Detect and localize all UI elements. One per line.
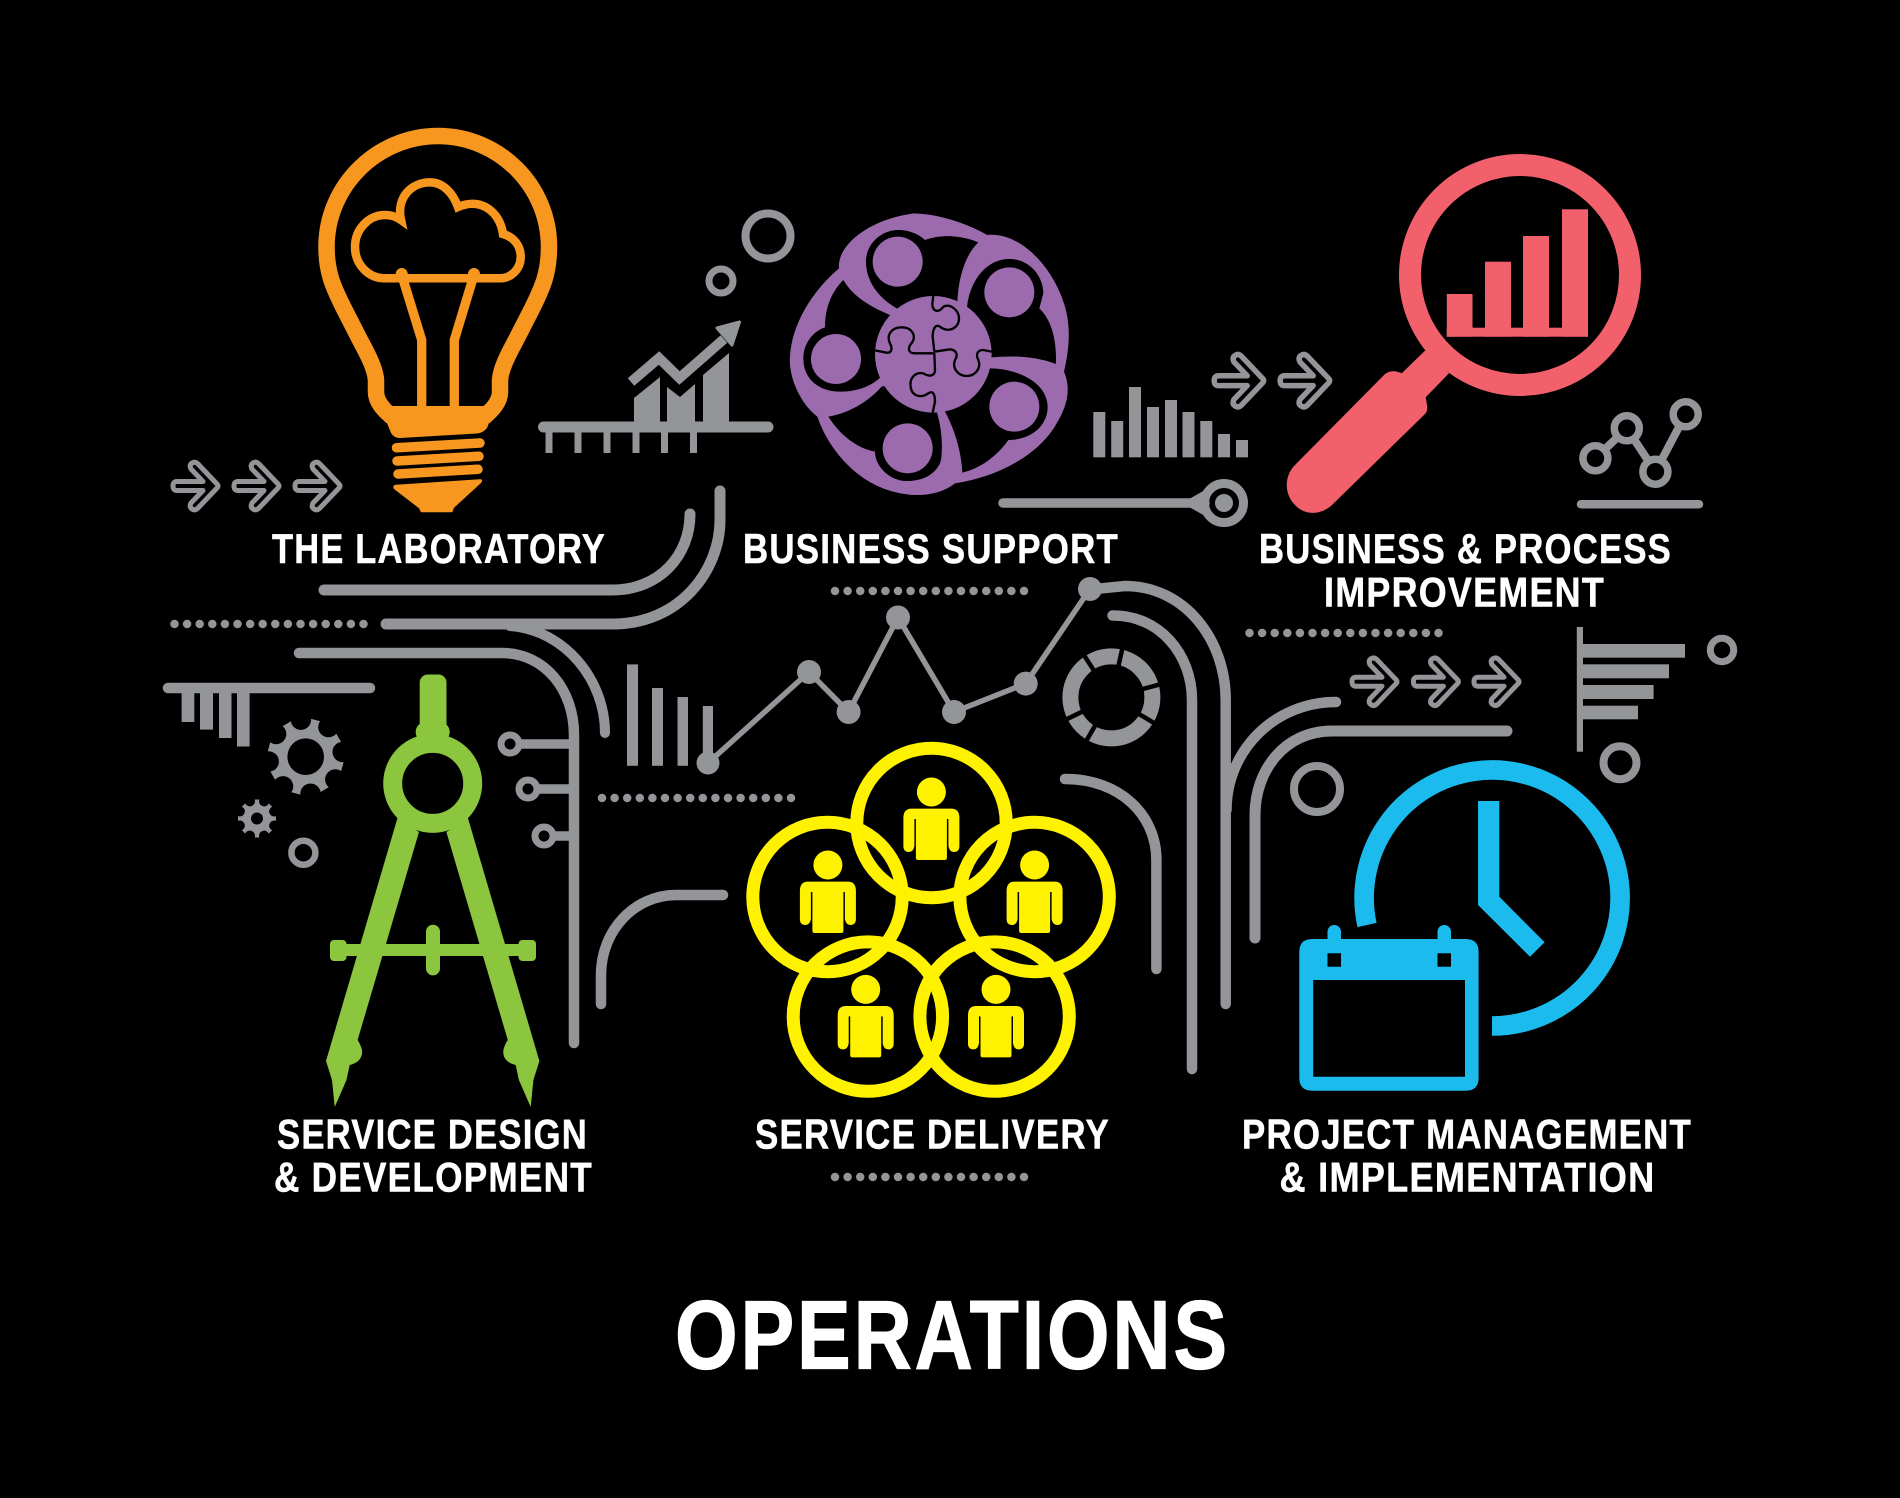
label: service design and development: SERVICE DESIGN [277, 1110, 588, 1158]
label: business and process improvement [1259, 525, 1672, 616]
decorative circle near gears [291, 841, 315, 865]
icon: clock and calendar [1299, 770, 1620, 1091]
target line [1003, 484, 1244, 522]
lollipop branches [501, 735, 574, 845]
icon: the laboratory light bulb [326, 136, 549, 512]
line chart with nodes [696, 577, 1102, 774]
label: the laboratory: THE LABORATORY [272, 525, 606, 572]
label: service design and development [274, 1110, 593, 1200]
bar chart: small histogram [1093, 387, 1248, 457]
label: business and process improvement: BUSINESS & PROCESS [1259, 525, 1672, 572]
icon: small gear [228, 790, 286, 847]
dotted lines [174, 591, 1439, 1177]
decorative circles near chart [709, 214, 790, 293]
icon: large gear [258, 710, 353, 804]
icon: magnifying glass with bar chart [1287, 165, 1630, 513]
chart: rising bars with arrow [544, 322, 768, 453]
arrows: top right [1214, 355, 1330, 407]
label: project management and implementation: & IMPLEMENTATION [1280, 1154, 1656, 1200]
title: OPERATIONS [675, 1280, 1230, 1390]
bar chart: vertical bars [627, 664, 713, 766]
label: business support: BUSINESS SUPPORT [743, 525, 1119, 572]
label: service delivery: SERVICE DELIVERY [755, 1110, 1110, 1158]
label: service design and development: & DEVELOPMENT [274, 1154, 593, 1200]
icon: business support puzzle and people [790, 213, 1069, 495]
label: project management and implementation [1242, 1110, 1692, 1200]
donut chart [1063, 645, 1164, 744]
label: business and process improvement: IMPROVEMENT [1324, 568, 1605, 616]
arrows: left top [173, 462, 340, 510]
icon: drafting compass [326, 674, 539, 1107]
circuit lines: connectors [299, 491, 1507, 1069]
bar chart: hanging bars [168, 688, 370, 746]
decorative circles right [1294, 638, 1734, 812]
label: project management and implementation: PROJECT MANAGEMENT [1242, 1110, 1692, 1158]
bar chart: horizontal bars [1577, 627, 1685, 752]
icon: service delivery overlapping circles with people [753, 748, 1109, 1091]
arrows: lower right [1352, 658, 1519, 706]
mini line chart with rings [1581, 402, 1699, 504]
